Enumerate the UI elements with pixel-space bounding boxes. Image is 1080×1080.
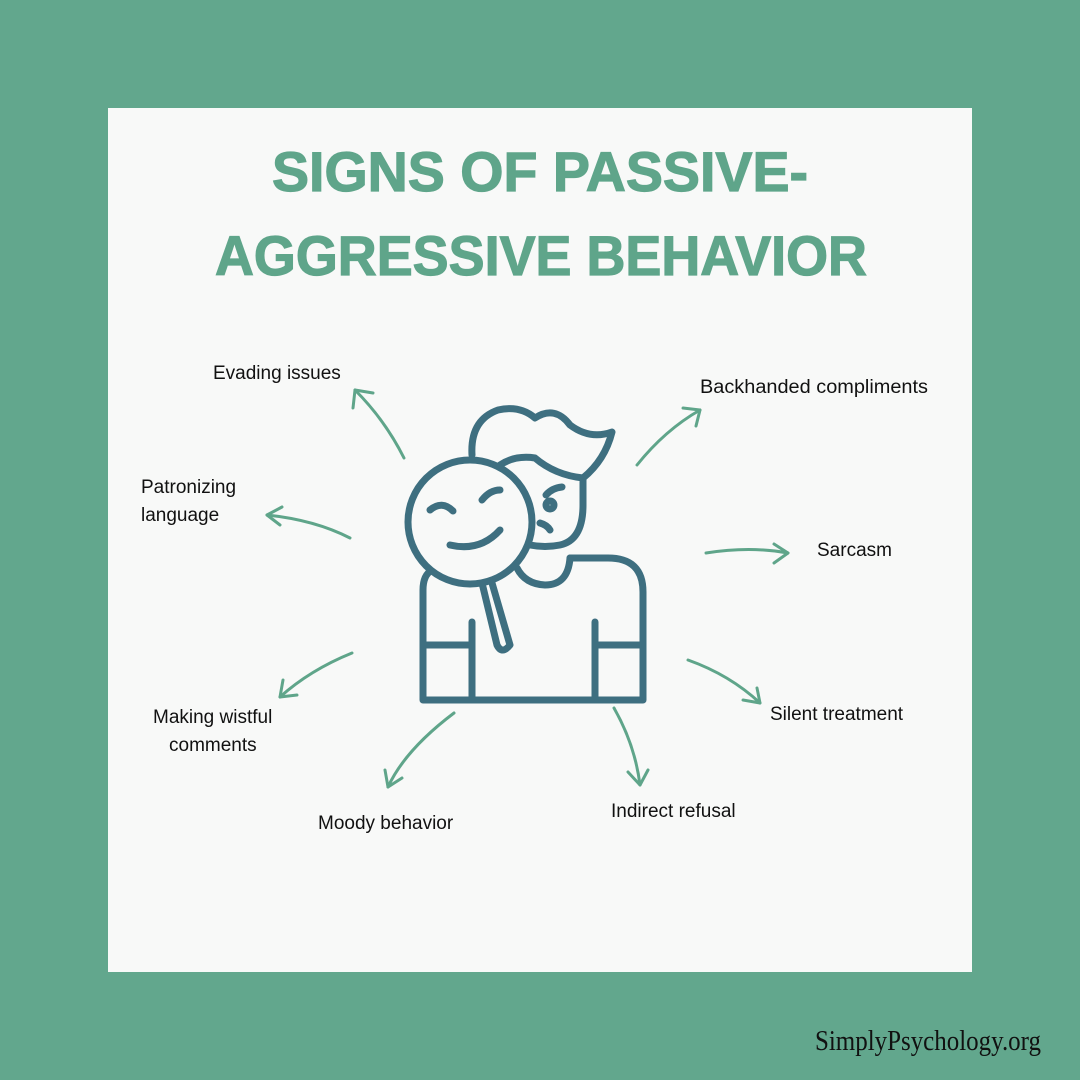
labels: Making wistful	[153, 707, 272, 728]
title	[215, 140, 867, 287]
labels: Backhanded compliments	[700, 377, 928, 398]
arrow: indirect	[614, 708, 648, 785]
title: AGGRESSIVE BEHAVIOR	[215, 224, 867, 287]
labels: Sarcasm	[817, 540, 892, 561]
labels: Silent treatment	[770, 704, 904, 725]
arrows	[267, 390, 788, 787]
arrow: wistful	[280, 653, 352, 697]
footer: site name: SimplyPsychology.org	[815, 1026, 1041, 1057]
arrow: backhanded	[637, 408, 700, 465]
title: SIGNS OF PASSIVE-	[272, 140, 808, 203]
arrow: patronizing	[267, 507, 350, 538]
labels: comments	[169, 735, 257, 756]
icon: person with smiling mask	[408, 409, 643, 700]
labels	[141, 363, 928, 834]
labels: Evading issues	[213, 363, 341, 384]
arrow: sarcasm	[706, 544, 788, 563]
labels: Patronizing	[141, 477, 236, 498]
labels: language	[141, 505, 219, 526]
arrow: silent	[688, 660, 760, 703]
arrow: evading	[353, 390, 404, 458]
arrow: moody	[385, 713, 454, 787]
panel: white card	[108, 108, 972, 972]
labels: Moody behavior	[318, 813, 454, 834]
labels: Indirect refusal	[611, 801, 736, 822]
